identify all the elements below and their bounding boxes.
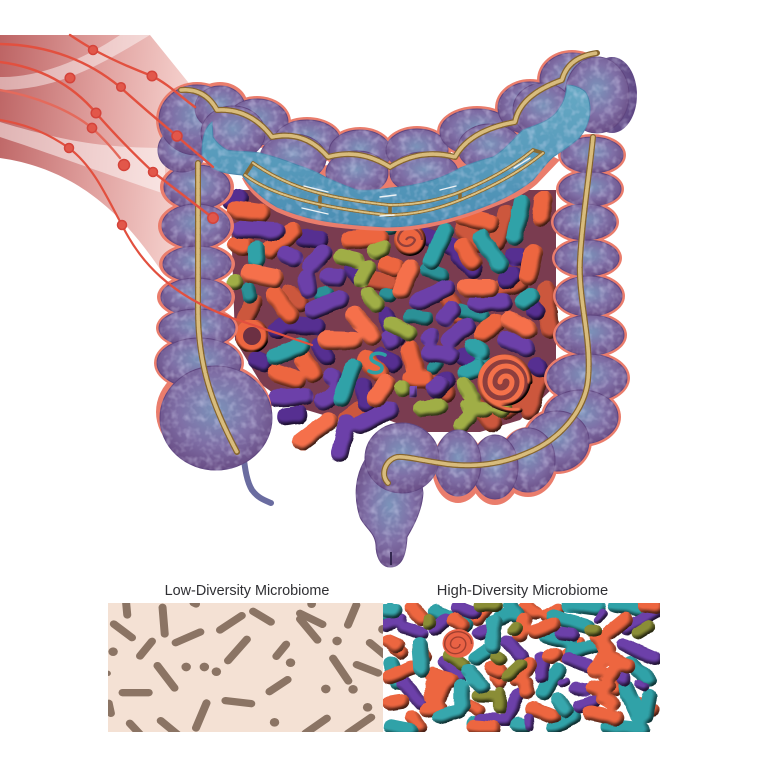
rectum opening — [390, 552, 392, 565]
line 3 — [0, 62, 213, 218]
heading: high diversity: High-Diversity Microbiome — [437, 583, 608, 599]
sparse brown rods — [105, 600, 388, 735]
coral outer wall — [154, 162, 272, 462]
microbes: back layer — [230, 198, 550, 423]
interior backing — [230, 190, 556, 432]
purple haustra — [157, 165, 272, 470]
gold band: highlight — [181, 53, 597, 483]
red signal lines — [0, 35, 312, 345]
triple strap on blue band — [245, 150, 543, 215]
colon: transverse front row — [201, 83, 573, 195]
coral outer wall — [432, 134, 630, 505]
icon: small teal S microbe — [369, 353, 385, 373]
line 1 — [70, 35, 195, 107]
gut microbes — [230, 198, 550, 453]
colon: descending and sigmoid — [356, 134, 630, 567]
icon: large spiral microbe — [479, 354, 531, 410]
purple haustra — [435, 137, 627, 499]
heading: low diversity: Low-Diversity Microbiome — [165, 583, 329, 599]
dense mixed rods — [387, 605, 656, 730]
red signal band — [0, 35, 205, 285]
colon: transverse back row — [156, 50, 637, 231]
rectum — [356, 423, 439, 567]
icon: coral spiral microbe — [443, 629, 474, 658]
gold band: outline — [181, 53, 597, 483]
icon: small spiral microbe — [394, 224, 426, 256]
coral outer wall — [156, 50, 607, 177]
line 5 — [0, 120, 312, 345]
colon: blue band — [202, 85, 590, 227]
gold bands — [181, 53, 597, 483]
icon: ring microbe — [239, 323, 265, 349]
panel: high diversity microbiome — [383, 603, 660, 732]
line 4 — [0, 90, 120, 158]
colon: appendix — [243, 452, 271, 503]
line 2 — [0, 44, 213, 167]
panel: low diversity microbiome — [105, 600, 388, 735]
microbes: front layer — [235, 200, 543, 453]
nodes — [64, 46, 218, 230]
purple haustra — [158, 53, 629, 174]
darker rear lobe — [587, 57, 637, 133]
white strap threads — [302, 158, 530, 216]
colon: ascending and cecum — [154, 162, 272, 470]
coral rim under blue band — [242, 150, 560, 231]
